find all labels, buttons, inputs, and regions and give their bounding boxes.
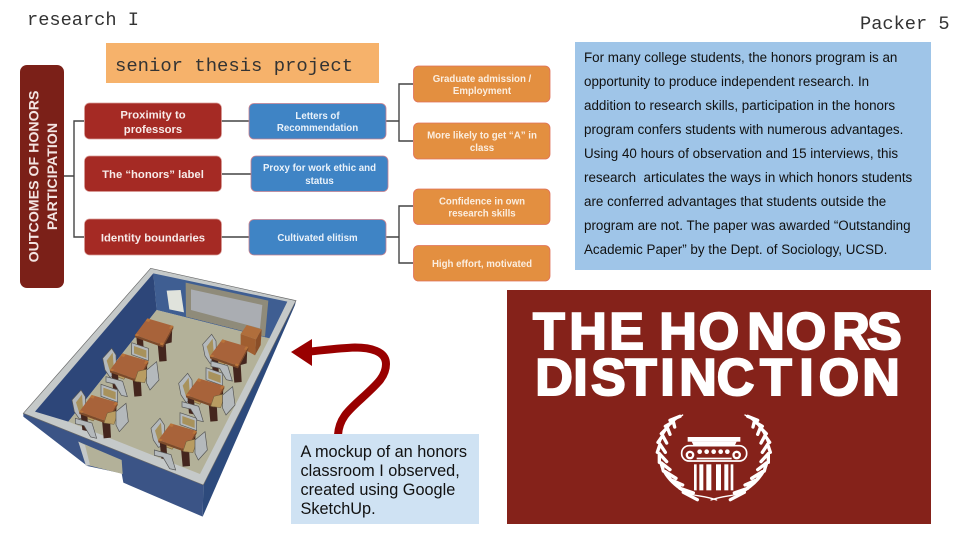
node: more likely to get A in class: More likely to get “A” in — [427, 130, 537, 142]
table 3 — [72, 384, 128, 438]
heading: research I: research I — [27, 9, 139, 31]
logo title: DISTINCTION — [535, 349, 900, 407]
text block: research summary: research articulates the ways in which honors students — [584, 170, 913, 185]
arrow: caption to classroom — [291, 339, 386, 435]
logo title: THE HONORS — [533, 303, 902, 361]
caption: classroom mockup: classroom I observed, — [300, 462, 460, 480]
node: identity boundaries — [84, 219, 222, 255]
root: outcomes of honors participation: OUTCOMES OF HONORS — [26, 91, 42, 262]
text block: research summary: addition to research skills, participation in the honors — [584, 98, 895, 113]
table 1 — [135, 318, 173, 362]
table 6 — [151, 413, 207, 470]
node: the honors label: The “honors” label — [102, 169, 204, 181]
node: confidence in own research skills: Confidence in own — [439, 196, 525, 208]
table 5 — [179, 368, 235, 422]
icon: column in laurel wreath — [657, 415, 770, 500]
node: proxy for work ethic and status: status — [305, 176, 334, 187]
node: high effort, motivated — [414, 246, 550, 281]
node: graduate admission / employment — [414, 66, 550, 102]
node: proximity to professors: Proximity to — [120, 110, 186, 122]
root: outcomes of honors participation: PARTICIPATION — [45, 123, 61, 230]
caption: classroom mockup — [291, 434, 479, 524]
illustration: 3D classroom mockup — [23, 268, 296, 517]
caption: classroom mockup: SketchUp. — [300, 500, 376, 518]
node: proximity to professors — [84, 103, 222, 139]
node: identity boundaries: Identity boundaries — [101, 232, 205, 244]
caption: classroom mockup: created using Google — [300, 481, 455, 499]
node: cultivated elitism: Cultivated elitism — [277, 233, 358, 244]
node: letters of recommendation: Recommendation — [277, 123, 358, 134]
text block: research summary: program are not. The paper was awarded “Outstanding — [584, 218, 911, 233]
text block: research summary: For many college students, the honors program is an — [584, 50, 897, 65]
node: proximity to professors: professors — [124, 124, 182, 136]
text block: research summary: Using 40 hours of observation and 15 interviews, this — [584, 146, 898, 161]
caption: classroom mockup: A mockup of an honors — [300, 443, 467, 461]
text block: research summary: program confers students with numerous advantages. — [584, 122, 903, 137]
text block: research summary: opportunity to produce independent research. In — [584, 74, 869, 89]
title: senior thesis project: senior thesis project — [115, 55, 353, 77]
heading: Packer 5: Packer 5 — [860, 13, 950, 35]
node: high effort, motivated: High effort, motivated — [432, 259, 532, 270]
concept map: outcomes of honors participation — [20, 65, 550, 288]
node: confidence in own research skills: research skills — [448, 208, 516, 220]
text block: research summary: Academic Paper” by the Dept. of Sociology, UCSD. — [584, 242, 887, 257]
cabinet — [241, 325, 262, 355]
node: graduate admission / employment: Graduate admission / — [433, 74, 532, 85]
node: more likely to get A in class — [414, 123, 550, 159]
node: proxy for work ethic and status: Proxy for work ethic and — [263, 163, 376, 174]
text block: research summary — [575, 42, 931, 270]
node: letters of recommendation: Letters of — [295, 111, 340, 122]
node: cultivated elitism — [249, 220, 386, 255]
node: proxy for work ethic and status — [251, 156, 388, 192]
table 4 — [203, 334, 248, 383]
panel: The Honors Distinction logo — [507, 290, 931, 524]
table 2 — [103, 343, 159, 397]
node: letters of recommendation — [249, 104, 386, 139]
title: senior thesis project — [106, 43, 379, 83]
node: graduate admission / employment: Employment — [453, 86, 512, 97]
node: the honors label — [84, 156, 222, 192]
logo title — [533, 303, 902, 407]
text block: research summary: are conferred advantages that students outside the — [584, 194, 886, 209]
root: outcomes of honors participation — [20, 65, 64, 288]
node: confidence in own research skills — [414, 189, 550, 224]
node: more likely to get A in class: class — [470, 143, 494, 154]
